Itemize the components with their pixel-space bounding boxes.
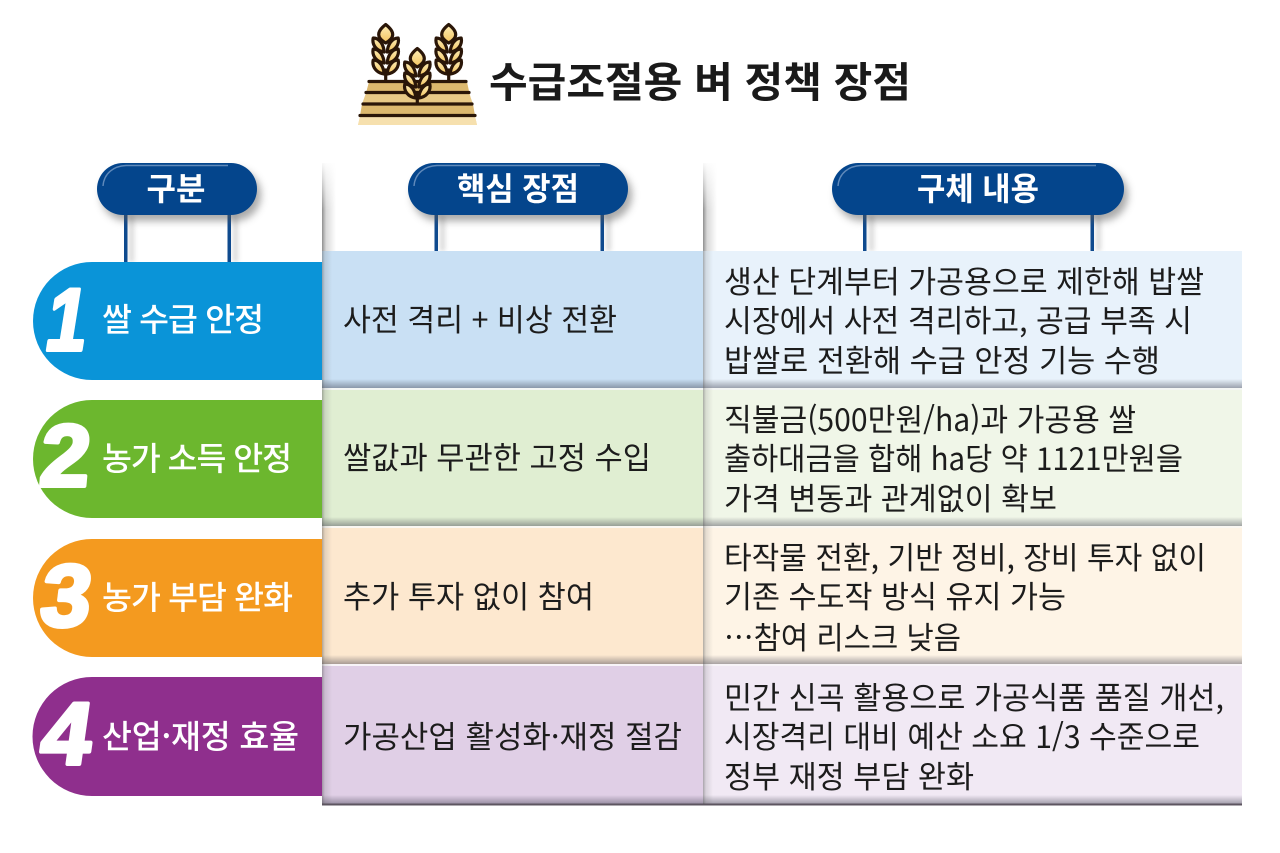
category pill 4 [32, 677, 322, 796]
row 1: 쌀 수급 안정 [33, 251, 1242, 388]
title: 수급조절용 벼 정책 장점 [489, 49, 911, 109]
detail cell 4: 정부 재정 부담 완화 [724, 752, 974, 797]
row 2: 농가 소득 안정 [33, 390, 1242, 526]
detail cell 2: 직불금(500만원/ha)과 가공용 쌀 [724, 395, 1136, 440]
header: 핵심 장점: 핵심 장점 [457, 164, 579, 210]
core advantage cell 1: 사전 격리 + 비상 전환 [343, 295, 617, 340]
category pill 1: 쌀 수급 안정 [102, 294, 264, 341]
category pill 1 [33, 262, 322, 380]
core advantage cell 1 [322, 251, 703, 388]
header: 핵심 장점 [408, 163, 632, 251]
column shadows [322, 160, 717, 251]
core advantage cell 4 [322, 666, 703, 804]
core advantage cell 2: 쌀값과 무관한 고정 수입 [343, 433, 651, 478]
detail cell 3: 타작물 전환, 기반 정비, 장비 투자 없이 [724, 533, 1206, 578]
category pill 3: 3 [36, 546, 98, 645]
detail cell 4 [703, 666, 1242, 804]
detail cell 3 [703, 528, 1242, 664]
row 4: 산업·재정 효율 [32, 666, 1242, 804]
detail cell 4: 시장격리 대비 예산 소요 1/3 수준으로 [724, 712, 1200, 757]
core advantage cell 3: 추가 투자 없이 참여 [343, 572, 594, 617]
core advantage cell 3 [322, 528, 703, 664]
detail cell 1 [703, 251, 1242, 388]
detail cell 2 [703, 390, 1242, 526]
detail cell 1: 시장에서 사전 격리하고, 공급 부족 시 [724, 296, 1192, 341]
category pill 2 [33, 400, 322, 518]
category pill 2: 농가 소득 안정 [102, 433, 292, 480]
icon: wheat field [358, 24, 477, 125]
category pill 3: 농가 부담 완화 [102, 572, 293, 619]
detail cell 2: 출하대금을 합해 ha당 약 1121만원을 [724, 434, 1183, 479]
category pill 1: 1 [40, 270, 96, 369]
core advantage cell 2 [322, 390, 703, 526]
category pill 4: 산업·재정 효율 [102, 711, 299, 758]
core advantage cell 4: 가공산업 활성화·재정 절감 [343, 712, 682, 757]
detail cell 2: 가격 변동과 관계없이 확보 [724, 474, 1057, 519]
category pill 3 [33, 539, 322, 657]
table edge shadows [322, 251, 1242, 806]
header: 구분 [97, 163, 261, 262]
header: 구분: 구분 [147, 164, 205, 210]
detail cell 4: 민간 신곡 활용으로 가공식품 품질 개선, [724, 673, 1224, 718]
detail cell 1: 밥쌀로 전환해 수급 안정 기능 수행 [724, 336, 1160, 381]
category pill 2: 2 [36, 406, 95, 505]
header: 구체 내용 [832, 163, 1128, 251]
category pill 4: 4 [35, 684, 99, 783]
row 3: 농가 부담 완화 [33, 528, 1242, 664]
detail cell 1: 생산 단계부터 가공용으로 제한해 밥쌀 [724, 257, 1204, 302]
header: 구체 내용: 구체 내용 [917, 164, 1039, 210]
detail cell 3: 기존 수도작 방식 유지 가능 [724, 572, 1066, 617]
detail cell 3: …참여 리스크 낮음 [724, 613, 961, 658]
